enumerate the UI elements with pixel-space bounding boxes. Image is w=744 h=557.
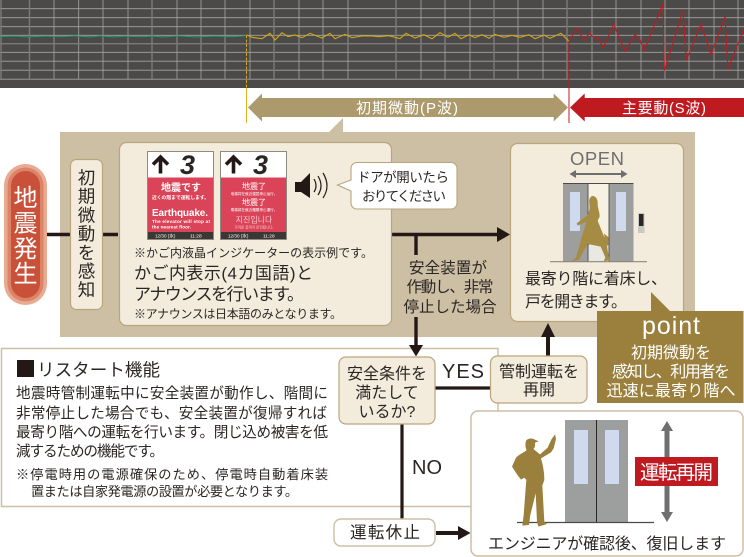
box: initial tremor detection: 期 bbox=[78, 187, 95, 207]
callout: point: 初期微動を bbox=[631, 344, 711, 362]
speech bubble: door announcement: おりてください bbox=[362, 189, 446, 204]
yellow P-wave trace bbox=[247, 33, 569, 41]
arrowheads bbox=[409, 227, 555, 540]
panel: in-car display and announcement bbox=[120, 142, 392, 326]
in-car display description: アナウンスを行います。 bbox=[134, 285, 304, 304]
in-car display description bbox=[134, 264, 313, 304]
door open description: 最寄り階に着床し、 bbox=[525, 270, 667, 288]
P-wave onset marker line bbox=[246, 35, 248, 123]
P-wave arrow: 初期微動 bbox=[248, 94, 568, 122]
earthquake occurrence pill: 生 bbox=[14, 261, 38, 288]
box: initial tremor detection: を bbox=[78, 243, 95, 263]
sign: Chinese and Korean display: 电梯将在就近楼层停止运行。 bbox=[231, 191, 277, 196]
box: stop operation: 運転休止 bbox=[350, 523, 420, 542]
announcement note: ※アナウンスは日本語のみとなります。 bbox=[134, 307, 342, 321]
decision box: safety conditions: 満たして bbox=[355, 384, 419, 402]
icon: up-down travel arrow bbox=[661, 421, 673, 522]
text: safety device triggered: 作動し、非常 bbox=[406, 278, 494, 296]
panel: door open at nearest floor bbox=[510, 144, 684, 322]
restart footnote: 置または自家発電源の設置が必要となります。 bbox=[31, 484, 298, 499]
illustration: engineer silhouette bbox=[512, 434, 556, 527]
illustration: open elevator with woman bbox=[550, 184, 647, 262]
P-wave arrow: 初期微動: 初期微動(P波) bbox=[356, 100, 458, 117]
panel: tan control-operation background bbox=[60, 118, 695, 337]
label: operation resumes: 運転再開 bbox=[640, 462, 713, 484]
sign: Japanese and English display bbox=[148, 150, 214, 240]
restart footnote: ※停電時用の電源確保のため、停電時自動着床装 bbox=[16, 466, 328, 482]
box: initial tremor detection bbox=[70, 160, 102, 310]
restart footnote bbox=[16, 466, 328, 499]
sign: Chinese and Korean display: 지진입니다 bbox=[236, 214, 273, 224]
sign: Japanese and English display: 12/30 (水) bbox=[155, 232, 176, 238]
box: initial tremor detection: 知 bbox=[78, 280, 95, 300]
earthquake occurrence pill: 発 bbox=[14, 236, 38, 263]
red S-wave trace bbox=[569, 3, 744, 71]
text: safety device triggered: 安全装置が bbox=[409, 259, 487, 277]
label: YES: YES bbox=[442, 361, 484, 383]
sign: Chinese and Korean display: 11:28 bbox=[263, 234, 275, 240]
callout: point bbox=[597, 292, 744, 403]
OPEN label and arrow bbox=[570, 148, 628, 178]
sign: Japanese and English display: 3 bbox=[180, 150, 195, 180]
sign: Japanese and English display: the nearest floor. bbox=[152, 224, 191, 230]
earthquake occurrence pill: 地 bbox=[14, 185, 38, 212]
icon: speaker bbox=[295, 173, 327, 198]
sign: Chinese and Korean display bbox=[220, 150, 286, 240]
box: resume controlled operation bbox=[490, 356, 587, 403]
sign: Chinese and Korean display: 電梯將在就近樓層停止運行。 bbox=[231, 207, 277, 212]
sign: Chinese and Korean display: 地震了 bbox=[242, 197, 266, 207]
sign: Chinese and Korean display: 가까운 층까지 운전합니다. bbox=[234, 224, 274, 230]
green pre-quake waveform bbox=[0, 36, 247, 37]
S-wave onset marker line bbox=[568, 41, 570, 123]
box: stop operation bbox=[334, 519, 435, 546]
decision box: safety conditions: 安全条件を bbox=[347, 365, 427, 383]
restart description: 非常停止した場合でも、安全装置が復帰すれば bbox=[16, 404, 327, 422]
sign: Japanese and English display: 11:28 bbox=[190, 234, 202, 240]
sign: Chinese and Korean display: 3 bbox=[253, 150, 268, 180]
restart description: 減するための機能です。 bbox=[16, 443, 164, 460]
flow connector lines bbox=[47, 234, 548, 533]
S-wave arrow: 主要動: 主要動(S波) bbox=[622, 100, 706, 117]
callout: point: 迅速に最寄り階へ bbox=[606, 382, 736, 400]
S-wave arrow: 主要動 bbox=[570, 94, 744, 122]
seismograph chart bbox=[0, 0, 744, 88]
earthquake occurrence pill: 震 bbox=[14, 210, 38, 238]
illustration: closed elevator doors bbox=[517, 420, 654, 522]
text: safety device triggered bbox=[404, 259, 497, 316]
panel: restart function bbox=[2, 348, 498, 506]
restart description: 地震時管制運転中に安全装置が動作し、階間に bbox=[16, 384, 328, 402]
speech bubble: door announcement bbox=[338, 162, 457, 209]
callout: point: 感知し、利用者を bbox=[612, 363, 730, 381]
box: resume controlled operation: 管制運転を bbox=[499, 363, 579, 381]
restart description: 最寄り階への運転を行います。閉じ込め被害を低 bbox=[16, 424, 328, 441]
OPEN label and arrow: OPEN bbox=[570, 148, 624, 169]
sign: Japanese and English display: The elevator will stop at bbox=[152, 219, 210, 224]
decision box: safety conditions: いるか? bbox=[359, 404, 416, 421]
engineer caption: エンジニアが確認後、復旧します bbox=[488, 535, 726, 553]
sign: Chinese and Korean display: 12/30 (水) bbox=[228, 232, 249, 238]
display example caption: ※かご内液晶インジケーターの表示例です。 bbox=[134, 245, 373, 260]
door open description: 戸を開きます。 bbox=[525, 293, 627, 311]
box: resume controlled operation: 再開 bbox=[523, 382, 555, 399]
panel: engineer restores service bbox=[471, 411, 743, 556]
sign: Japanese and English display: Earthquake. bbox=[152, 208, 208, 219]
in-car display description: かご内表示(4カ国語)と bbox=[134, 264, 313, 283]
box: initial tremor detection: 微 bbox=[78, 205, 96, 225]
heading: restart function: リスタート機能 bbox=[37, 360, 160, 380]
speech bubble: door announcement: ドアが開いたら bbox=[357, 170, 449, 185]
text: safety device triggered: 停止した場合 bbox=[404, 298, 497, 316]
restart description bbox=[16, 384, 328, 460]
decision box: safety conditions bbox=[339, 357, 435, 424]
earthquake occurrence pill bbox=[4, 164, 47, 305]
door open description bbox=[525, 270, 667, 311]
box: initial tremor detection: 初 bbox=[78, 168, 95, 188]
label: operation resumes bbox=[635, 457, 718, 486]
box: initial tremor detection: 感 bbox=[78, 262, 95, 282]
callout: point: point bbox=[642, 312, 700, 340]
label: NO: NO bbox=[412, 457, 442, 479]
sign: Japanese and English display: 地震です bbox=[161, 181, 201, 194]
sign: Japanese and English display: 近くの階まで運転します。 bbox=[152, 194, 209, 201]
sign: Chinese and Korean display: 地震了 bbox=[242, 181, 266, 191]
box: initial tremor detection: 動 bbox=[78, 224, 95, 244]
